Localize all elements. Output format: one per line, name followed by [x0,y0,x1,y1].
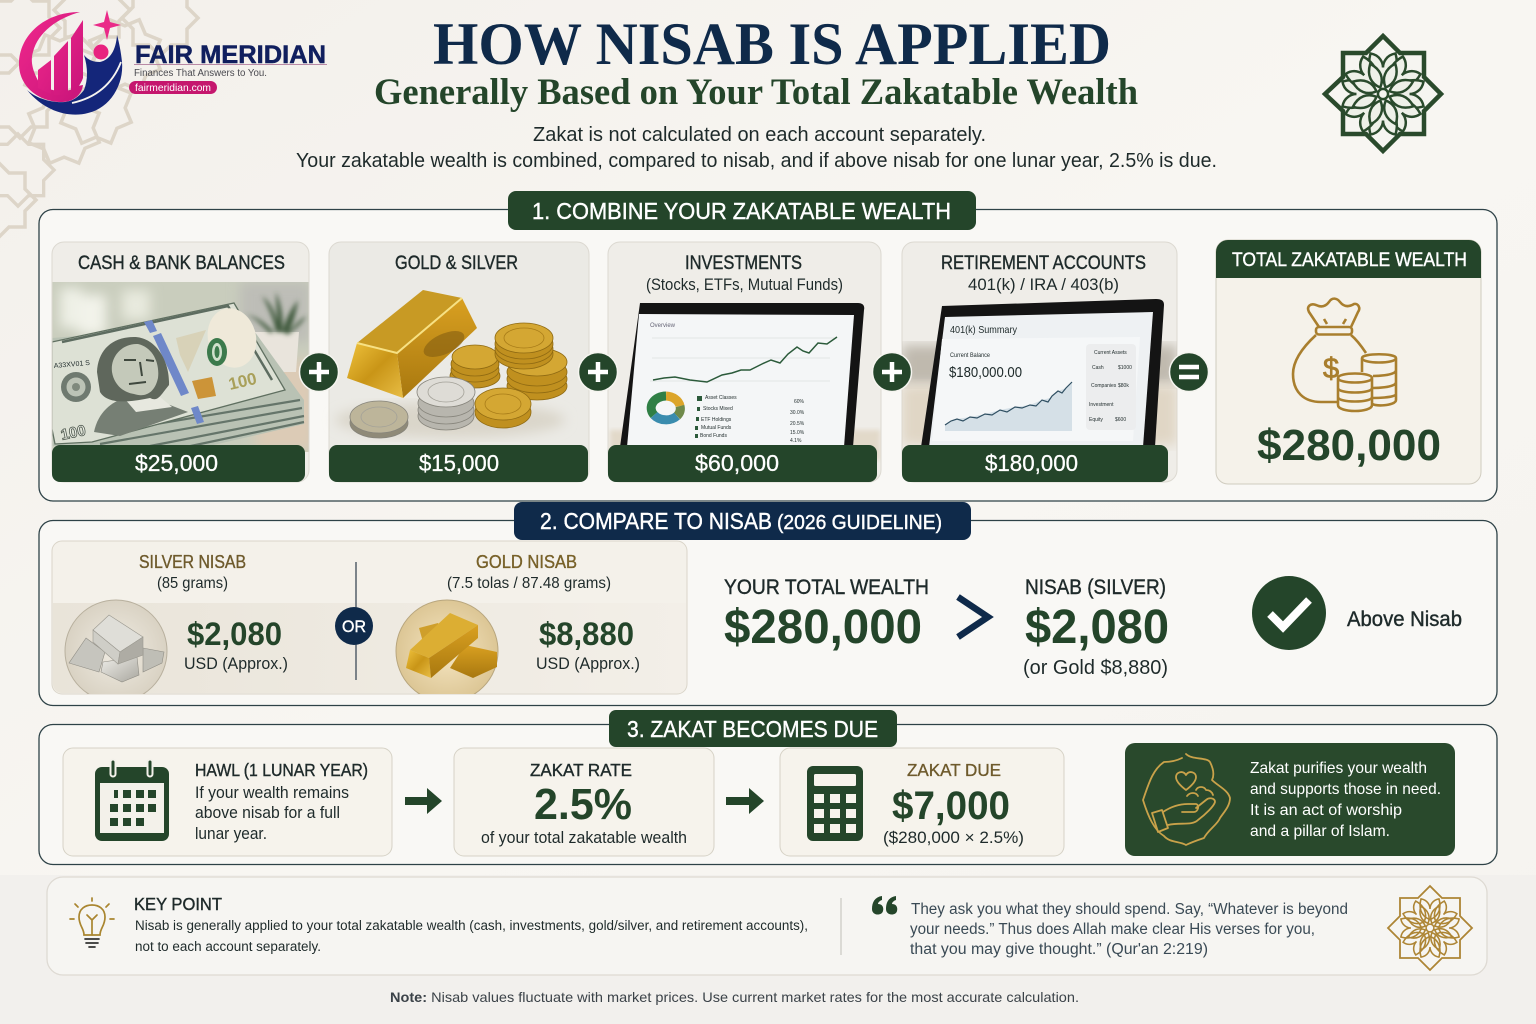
image: laptop with 401k summary: 401(k) Summary [950,324,1018,336]
quote text: that you may give thought.” (Qur'an 2:219) [910,941,1208,958]
value bar: $15,000 [419,450,499,476]
nisab silver comparison [1023,576,1169,679]
card: zakat rate: ZAKAT RATE [530,760,632,780]
icon: money bag and coins [1293,299,1396,411]
logo tagline: Finances That Answers to You. [134,68,267,79]
callout: zakat purifies [1125,743,1455,856]
callout: zakat purifies: It is an act of worship [1250,802,1402,819]
card: hawl: lunar year. [195,825,267,843]
gold nisab: GOLD NISAB [476,552,577,572]
image: laptop with portfolio chart: 60% [794,399,805,405]
section 2 heading [514,502,971,540]
panel: section 3 zakat becomes due [39,710,1497,864]
logo wordmark: FAIR MERIDIAN [135,41,326,69]
panel: section 2 compare to nisab [39,502,1497,706]
card: zakat rate: 2.5% [534,780,632,829]
icon: quotation mark [872,896,897,915]
operator: plus [578,352,618,392]
icon: check mark [1252,576,1326,650]
icon: light bulb [70,898,114,947]
key point text [134,894,808,954]
silver nisab: (85 grams) [157,575,228,592]
nisab silver comparison: NISAB (SILVER) [1025,576,1166,599]
intro text [296,124,1217,172]
your total wealth: $280,000 [724,601,922,654]
section 3 heading [609,710,897,747]
image: laptop with 401k summary: $180,000.00 [949,364,1022,381]
callout: zakat purifies: Zakat purifies your wealth [1250,760,1427,777]
gold nisab [396,552,640,702]
image: laptop with portfolio chart: Asset Classes [705,395,737,401]
image: laptop with portfolio chart: 15.0% [790,430,805,436]
silver coin stack [350,377,475,438]
icon: greater than [958,597,988,637]
value bar [608,445,877,482]
image: laptop with portfolio chart: Stocks Mixed [703,406,733,412]
callout: zakat purifies: and supports those in need. [1250,781,1441,798]
card: retirement accounts: 401(k) / IRA / 403(b) [968,275,1119,294]
image: stack of dollar bills: A33XV01 S [54,360,91,370]
card: zakat due: ($280,000 × 2.5%) [883,829,1024,847]
card: total zakatable wealth [1216,240,1481,484]
card: cash and bank balances: CASH & BANK BALANCES [78,253,285,274]
value bar [329,445,588,482]
card: gold and silver: GOLD & SILVER [395,253,518,274]
image: laptop with 401k summary: $600 [1115,417,1126,423]
your total wealth: YOUR TOTAL WEALTH [724,576,929,599]
card: total zakatable wealth: $280,000 [1257,421,1441,470]
image: laptop with 401k summary: $80k [1118,383,1129,389]
image: stack of dollar bills [52,282,315,452]
image: laptop with portfolio chart: ETF Holdings [701,417,732,423]
card: zakat rate [454,748,714,856]
image: laptop with portfolio chart: 20.5% [790,421,805,427]
arrow [405,788,442,814]
card: hawl: If your wealth remains [195,784,349,802]
image: laptop with portfolio chart: 4.1% [790,438,802,444]
value bar: $25,000 [135,450,218,476]
image: laptop with portfolio chart: 30.0% [790,410,805,416]
quote text [910,901,1348,958]
logo icon: figure and star [94,44,108,60]
image: laptop with 401k summary [902,299,1177,447]
arrow [726,788,764,814]
panel: silver and gold nisab values [52,541,687,702]
decorative corner lattice [0,0,198,238]
your total wealth [724,576,929,654]
image: stack of dollar bills: 100 [227,369,259,394]
icon: green geometric ornament [1325,36,1441,151]
image: laptop with 401k summary: Companies [1091,383,1117,389]
icon: hand with heart [1143,754,1230,845]
key point text: not to each account separately. [135,939,321,954]
image: laptop with portfolio chart: Mutual Funds [701,425,732,431]
silver nisab: $2,080 [187,616,282,652]
image: gold bar and coins [335,290,567,438]
intro text: Your zakatable wealth is combined, compared to nisab, and if above nisab for one lunar year, 2.5% is due. [296,150,1217,172]
card: zakat due: $7,000 [892,784,1010,828]
icon: calculator [807,766,863,841]
card: investments: INVESTMENTS [685,253,802,274]
card: investments: (Stocks, ETFs, Mutual Funds) [646,275,843,294]
operator: equals [1170,352,1208,392]
donut chart [651,396,680,420]
icon: silver bars [65,600,167,702]
image: laptop with 401k summary: Equity [1089,417,1103,423]
operator: plus [872,352,912,392]
logo icon: crescent [19,10,122,115]
card: retirement accounts [902,242,1177,482]
panel: section 1 combine wealth [39,191,1497,501]
icon: gold geometric ornament [1388,886,1472,970]
silver nisab [65,552,288,702]
card: hawl [63,748,392,856]
value bar [902,445,1168,482]
icon: money bag and coins: $ [1323,353,1339,385]
divider with OR badge: OR [342,617,366,636]
section 1 heading: 1. COMBINE YOUR ZAKATABLE WEALTH [532,198,951,224]
image: laptop with 401k summary: Current Assets [1094,350,1127,356]
card: zakat due: ZAKAT DUE [907,760,1001,780]
image: laptop with portfolio chart: Bond Funds [700,433,727,439]
section 2 heading: (2026 GUIDELINE) [777,512,942,534]
value bar [52,445,305,482]
nisab silver comparison: (or Gold $8,880) [1023,657,1168,679]
panel: key point and quote [47,877,1487,975]
gold bar [347,290,477,398]
card: hawl: HAWL (1 LUNAR YEAR) [195,760,368,780]
silver nisab: SILVER NISAB [139,552,246,572]
image: laptop with portfolio chart: Overview [650,323,676,329]
logo url pill: fairmeridian.com [135,82,211,94]
value bar: $60,000 [695,450,779,476]
image: laptop with portfolio chart [610,303,880,460]
key point text: Nisab is generally applied to your total zakatable wealth (cash, investments, gold/silver, and retirement accounts), [135,918,808,933]
card: hawl: above nisab for a full [195,804,340,822]
card: zakat due [780,748,1064,856]
gold nisab: USD (Approx.) [536,654,640,673]
card: cash and bank balances [52,242,315,482]
intro text: Zakat is not calculated on each account separately. [533,124,986,146]
silver nisab: USD (Approx.) [184,654,288,673]
card: gold and silver [329,242,589,482]
title: HOW NISAB IS APPLIED [433,11,1111,77]
card: retirement accounts: RETIREMENT ACCOUNTS [941,253,1146,274]
callout: zakat purifies: and a pillar of Islam. [1250,823,1390,840]
quote text: They ask you what they should spend. Say, “Whatever is beyond [911,901,1348,918]
image: laptop with 401k summary: Current Balance [950,352,990,359]
divider with OR badge [335,562,373,680]
card: zakat rate: of your total zakatable wealth [481,829,687,847]
gold coin stacks [450,323,567,400]
value bar: $180,000 [985,450,1078,476]
section 3 heading: 3. ZAKAT BECOMES DUE [627,716,878,742]
key point text: KEY POINT [134,894,222,914]
above nisab label: Above Nisab [1347,608,1462,631]
flat gold coin [475,388,531,428]
section 1 heading [508,191,976,230]
nisab silver comparison: $2,080 [1025,601,1169,654]
section 2 heading: 2. COMPARE TO NISAB [540,508,772,534]
gold nisab: $8,880 [539,616,634,652]
icon: calendar [95,762,169,841]
icon: gold bars [396,600,498,702]
logo: Fair Meridian [19,10,327,115]
image: stack of dollar bills: 100 [59,422,87,444]
card: investments [608,242,881,482]
footnote: Note: Nisab values fluctuate with market prices. Use current market rates for the most accurate calculation. [390,989,1079,1005]
logo icon: rising bars [38,20,83,95]
operator: plus [300,352,338,392]
card: total zakatable wealth: TOTAL ZAKATABLE WEALTH [1232,249,1467,271]
gold nisab: (7.5 tolas / 87.48 grams) [447,575,611,592]
image: laptop with 401k summary: Cash [1092,365,1104,371]
image: laptop with 401k summary: $1000 [1118,365,1132,371]
quote text: your needs.” Thus does Allah make clear His verses for you, [910,921,1315,938]
image: laptop with 401k summary: Investment [1089,402,1114,408]
subtitle: Generally Based on Your Total Zakatable Wealth [374,72,1138,113]
